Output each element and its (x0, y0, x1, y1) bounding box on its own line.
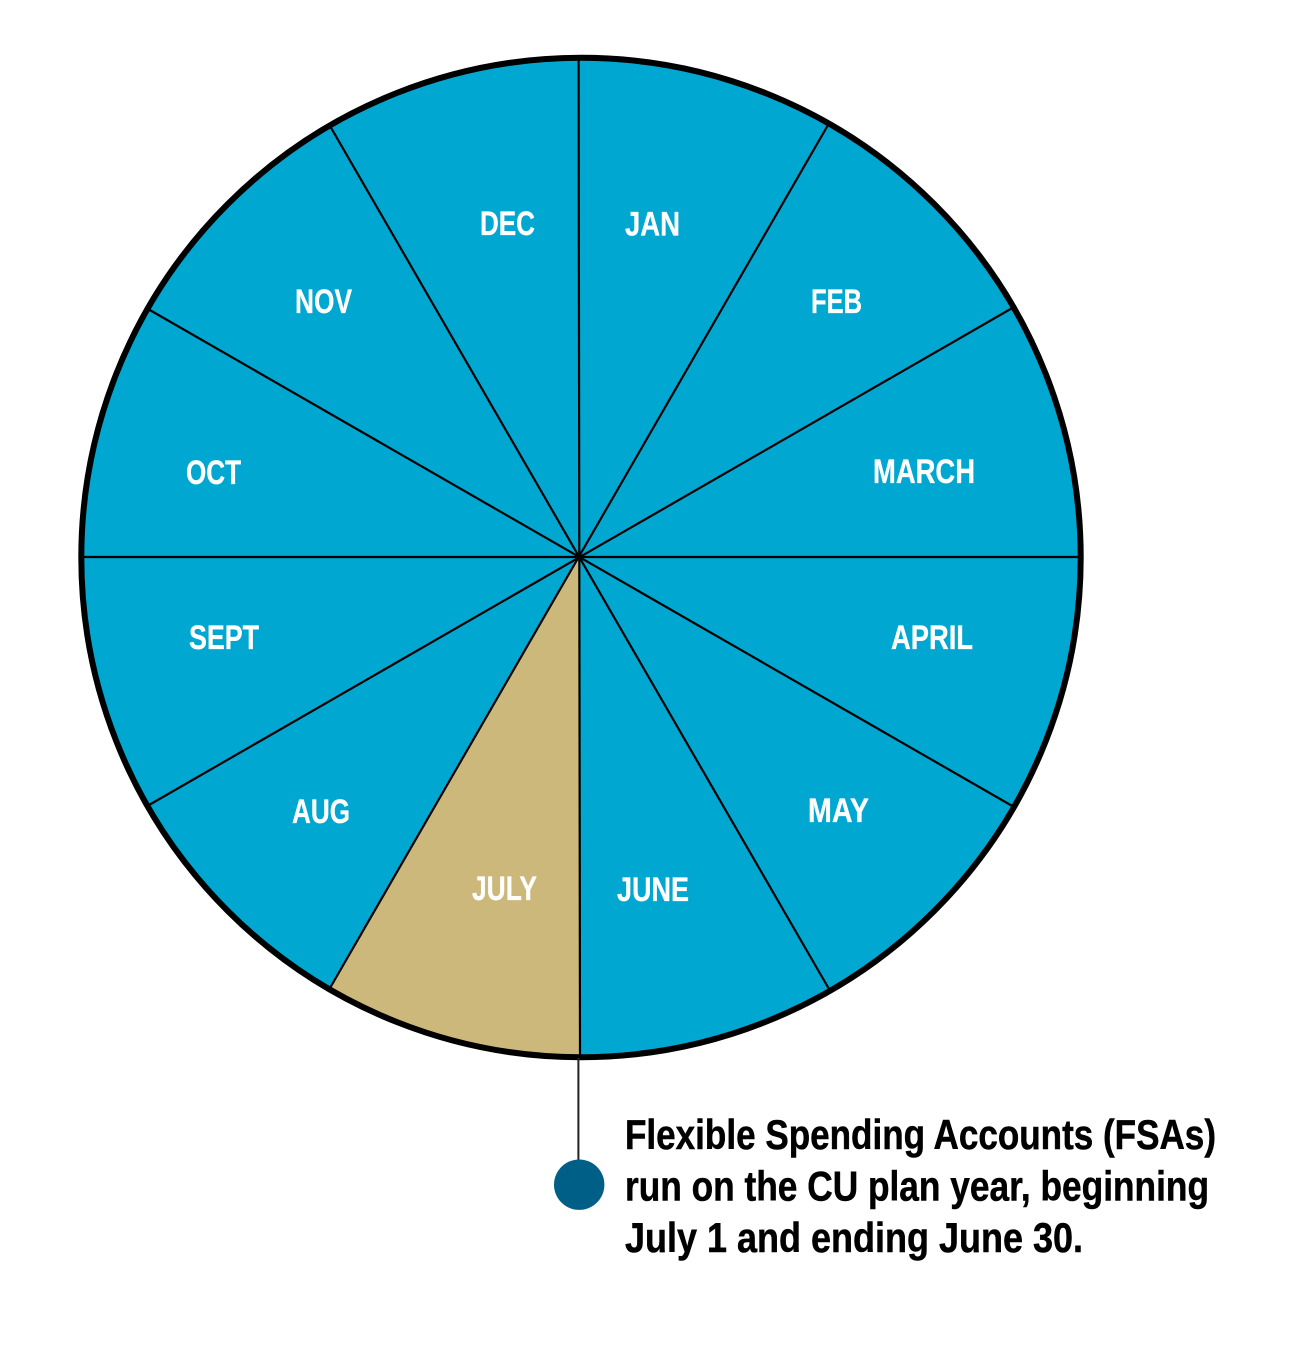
pie chart: plan year months (81, 57, 1081, 1057)
callout connector line (577, 1058, 579, 1165)
month labels: NOV (295, 283, 352, 321)
highlighted segment: July (330, 557, 580, 1057)
month labels: SEPT (189, 619, 259, 657)
month labels: JAN (625, 206, 680, 244)
month labels: OCT (186, 454, 241, 492)
wheel outline (81, 58, 1081, 1057)
month labels: FEB (811, 283, 862, 321)
month labels: JUNE (617, 871, 689, 909)
month labels: JULY (472, 870, 537, 908)
month labels: AUG (292, 793, 350, 831)
month labels: MARCH (873, 453, 975, 491)
month labels (186, 205, 975, 909)
callout dot (554, 1160, 604, 1210)
month labels: MAY (808, 792, 869, 830)
wheel background (81, 58, 1081, 1057)
segment dividers (82, 57, 1080, 1056)
callout text: run on the CU plan year, beginning (625, 1162, 1209, 1210)
callout text (625, 1111, 1216, 1261)
month labels: DEC (480, 205, 535, 243)
callout text: July 1 and ending June 30. (625, 1214, 1083, 1261)
month labels: APRIL (891, 619, 973, 657)
